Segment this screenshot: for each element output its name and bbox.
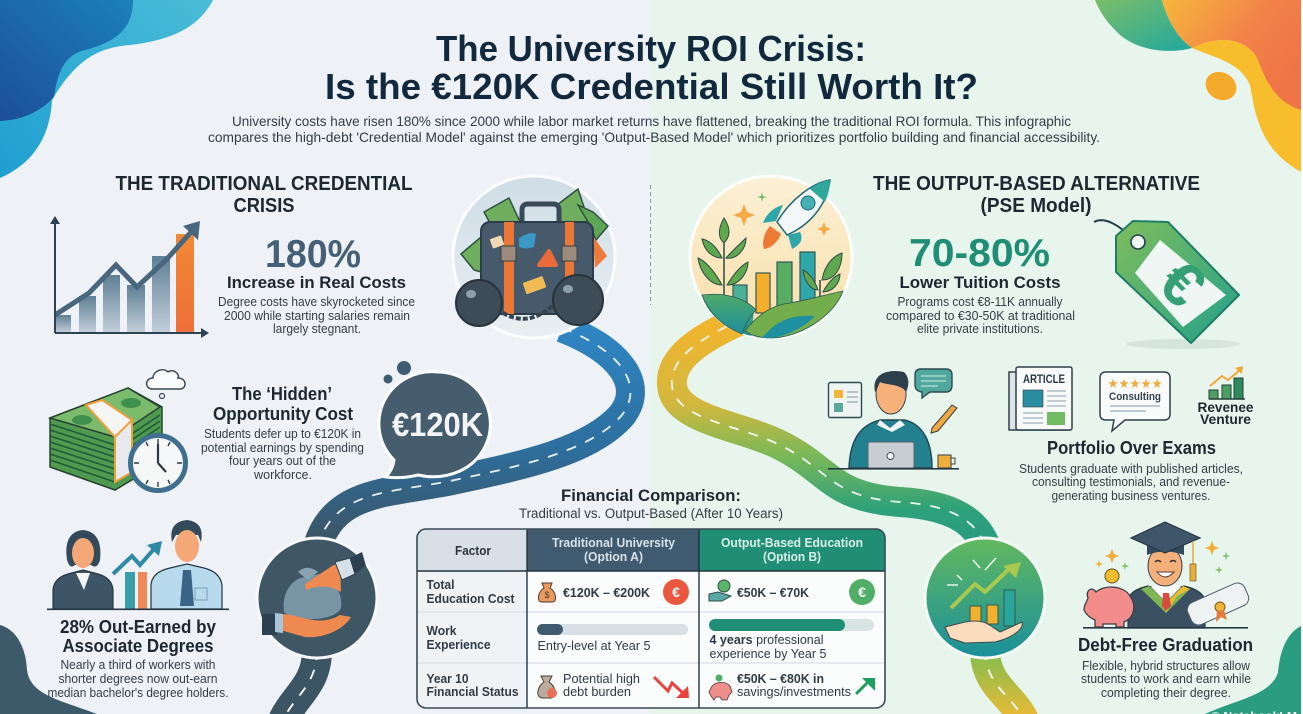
row labels: Year 10	[426, 671, 468, 686]
corner decoration: top left blobs	[0, 0, 213, 178]
panel: output-based alternative	[690, 172, 1254, 700]
background: traditional side	[0, 0, 651, 714]
icon: person at laptop	[828, 369, 959, 470]
icon: consulting testimonial	[1100, 372, 1170, 431]
row: total education cost: €	[858, 584, 866, 600]
icon: thought cloud	[147, 370, 185, 398]
icon: revenue venture	[1198, 366, 1254, 427]
description: out-earned	[48, 658, 228, 700]
description: debt-free	[1081, 659, 1251, 700]
callout: €120K bubble	[379, 361, 490, 478]
row labels: Total	[426, 577, 454, 592]
row labels: Education Cost	[426, 591, 515, 606]
title	[325, 28, 978, 107]
icon: hands with money bag	[257, 538, 377, 658]
divider	[650, 185, 652, 305]
row: work experience: 4 years professional	[710, 632, 824, 647]
row: year 10 financial status: Potential high	[563, 671, 640, 686]
description: opportunity cost: four years out of the	[229, 454, 336, 468]
description: opportunity cost	[201, 427, 364, 482]
row: total education cost	[538, 579, 875, 605]
icon: article	[1009, 367, 1072, 430]
stat: 180%: 180%	[265, 233, 361, 276]
heading: out-earned	[60, 616, 217, 656]
heading: financial comparison: Financial Comparison:	[561, 486, 741, 505]
table header row: (Option B)	[763, 549, 821, 564]
intro text: compares the high-debt 'Credential Model' against the emerging 'Output-Based Model' which prioritizes portfolio building and financial accessibility.	[208, 129, 1100, 145]
table header row: Traditional University	[552, 535, 676, 550]
stat label: tuition: Lower Tuition Costs	[900, 273, 1060, 292]
icon: revenue venture: Revenee	[1198, 400, 1254, 415]
description: 2000 while starting salaries remain	[224, 309, 410, 323]
frame edge	[1301, 0, 1303, 714]
description: debt-free: Flexible, hybrid structures allow	[1082, 659, 1251, 673]
background: output-based side	[650, 0, 1303, 714]
row labels	[426, 577, 518, 699]
icon: rocket	[763, 180, 830, 249]
icon: article: ARTICLE	[1023, 372, 1065, 386]
icon: consulting testimonial: ★★★★★	[1108, 376, 1162, 391]
row: work experience	[537, 619, 874, 661]
row labels: Experience	[426, 637, 490, 652]
icon: revenue venture: Venture	[1200, 412, 1251, 427]
description: debt-free: completing their degree.	[1101, 686, 1231, 700]
row: work experience: experience by Year 5	[710, 646, 826, 661]
table header row: Output-Based Education	[721, 535, 863, 550]
road: traditional path	[283, 328, 630, 714]
table header row: (Option A)	[584, 549, 643, 564]
description: tuition	[886, 295, 1075, 336]
heading: hidden opportunity cost	[213, 384, 353, 424]
icon: consulting testimonial: Consulting	[1109, 391, 1161, 403]
table header row: Factor	[455, 543, 491, 558]
callout: €120K bubble: €120K	[392, 406, 483, 443]
panel: traditional credential crisis	[47, 172, 615, 700]
intro text	[208, 113, 1100, 145]
row: year 10 financial status: savings/investments	[737, 684, 851, 699]
description: opportunity cost: Students defer up to €120K in	[204, 427, 361, 441]
row: year 10 financial status: debt burden	[563, 684, 631, 699]
row: total education cost: $	[544, 590, 550, 600]
description: largely stegnant.	[273, 322, 361, 336]
row labels: Work	[426, 623, 457, 638]
description: portfolio: consulting testimonials, and revenue-	[1032, 475, 1230, 489]
icon: hand with growth chart	[925, 538, 1045, 658]
description: portfolio: generating business ventures.	[1052, 489, 1210, 503]
description: debt-free: students to work and earn while	[1081, 672, 1251, 686]
intro text: University costs have risen 180% since 2000 while labor market returns have flattened, breaking the traditional ROI formula. This infographic	[232, 113, 1071, 129]
heading: debt-free graduation: Debt-Free Graduation	[1078, 634, 1253, 655]
icon: rocket and growth	[690, 176, 852, 338]
heading: hidden opportunity cost: Opportunity Cost	[213, 404, 353, 424]
road: output path	[672, 318, 1024, 714]
row: total education cost: €50K – €70K	[737, 585, 810, 600]
heading: output-based	[873, 172, 1200, 217]
corner decoration: bottom right blob	[1205, 625, 1303, 714]
heading: output-based: (PSE Model)	[980, 194, 1092, 217]
icon: price tag with euro: €	[1145, 247, 1219, 321]
row: total education cost: €	[672, 584, 680, 600]
corner decoration: top right blobs	[1095, 0, 1301, 172]
row: year 10 financial status	[538, 671, 875, 700]
panel: financial comparison	[417, 486, 885, 708]
description: tuition: elite private institutions.	[917, 322, 1043, 336]
row: work experience: Entry-level at Year 5	[538, 638, 650, 653]
row: total education cost: €120K – €200K	[563, 585, 651, 600]
heading: hidden opportunity cost: The ‘Hidden’	[232, 384, 332, 404]
heading: portfolio over exams: Portfolio Over Exams	[1047, 438, 1216, 458]
description: opportunity cost: workforce.	[253, 468, 312, 482]
description: out-earned: Nearly a third of workers with	[60, 658, 216, 672]
table: comparison	[417, 529, 885, 708]
description: portfolio	[1019, 462, 1243, 503]
description: tuition: compared to €30-50K at traditional	[886, 309, 1075, 323]
description: tuition: Programs cost €8-11K annually	[898, 295, 1063, 309]
icon: suitcase with ball and chain	[453, 176, 615, 338]
title: Is the €120K Credential Still Worth It?	[325, 66, 978, 107]
description: portfolio: Students graduate with published articles,	[1019, 462, 1243, 476]
icon: workers comparison	[47, 520, 229, 610]
stat label: Increase in Real Costs	[227, 273, 406, 292]
description: out-earned: median bachelor's degree holders.	[48, 686, 228, 700]
subheading: comparison: Traditional vs. Output-Based (After 10 Years)	[519, 506, 783, 521]
description	[218, 295, 415, 336]
heading: traditional: CRISIS	[234, 194, 294, 217]
heading: output-based: THE OUTPUT-BASED ALTERNATIVE	[873, 172, 1200, 195]
row labels: Financial Status	[426, 684, 518, 699]
icon: graduate with piggy bank	[1083, 522, 1251, 629]
heading: out-earned: 28% Out-Earned by	[60, 616, 217, 637]
description: Degree costs have skyrocketed since	[218, 295, 415, 309]
icon: stack of cash with clock	[50, 370, 186, 490]
heading: traditional: THE TRADITIONAL CREDENTIAL	[116, 172, 412, 195]
heading: traditional	[116, 172, 412, 217]
table header row	[455, 535, 863, 564]
heading: out-earned: Associate Degrees	[62, 635, 214, 656]
stat: 70-80%: 70-80%	[909, 232, 1050, 275]
icon: price tag with euro	[1094, 220, 1240, 349]
chart: rising costs	[50, 216, 209, 338]
corner decoration: bottom left blob	[0, 625, 97, 714]
title: The University ROI Crisis:	[436, 28, 866, 69]
description: opportunity cost: potential earnings by spending	[201, 441, 364, 455]
row: year 10 financial status: €50K – €80K in	[737, 671, 824, 686]
description: out-earned: shorter degrees now out-earn	[58, 672, 218, 686]
